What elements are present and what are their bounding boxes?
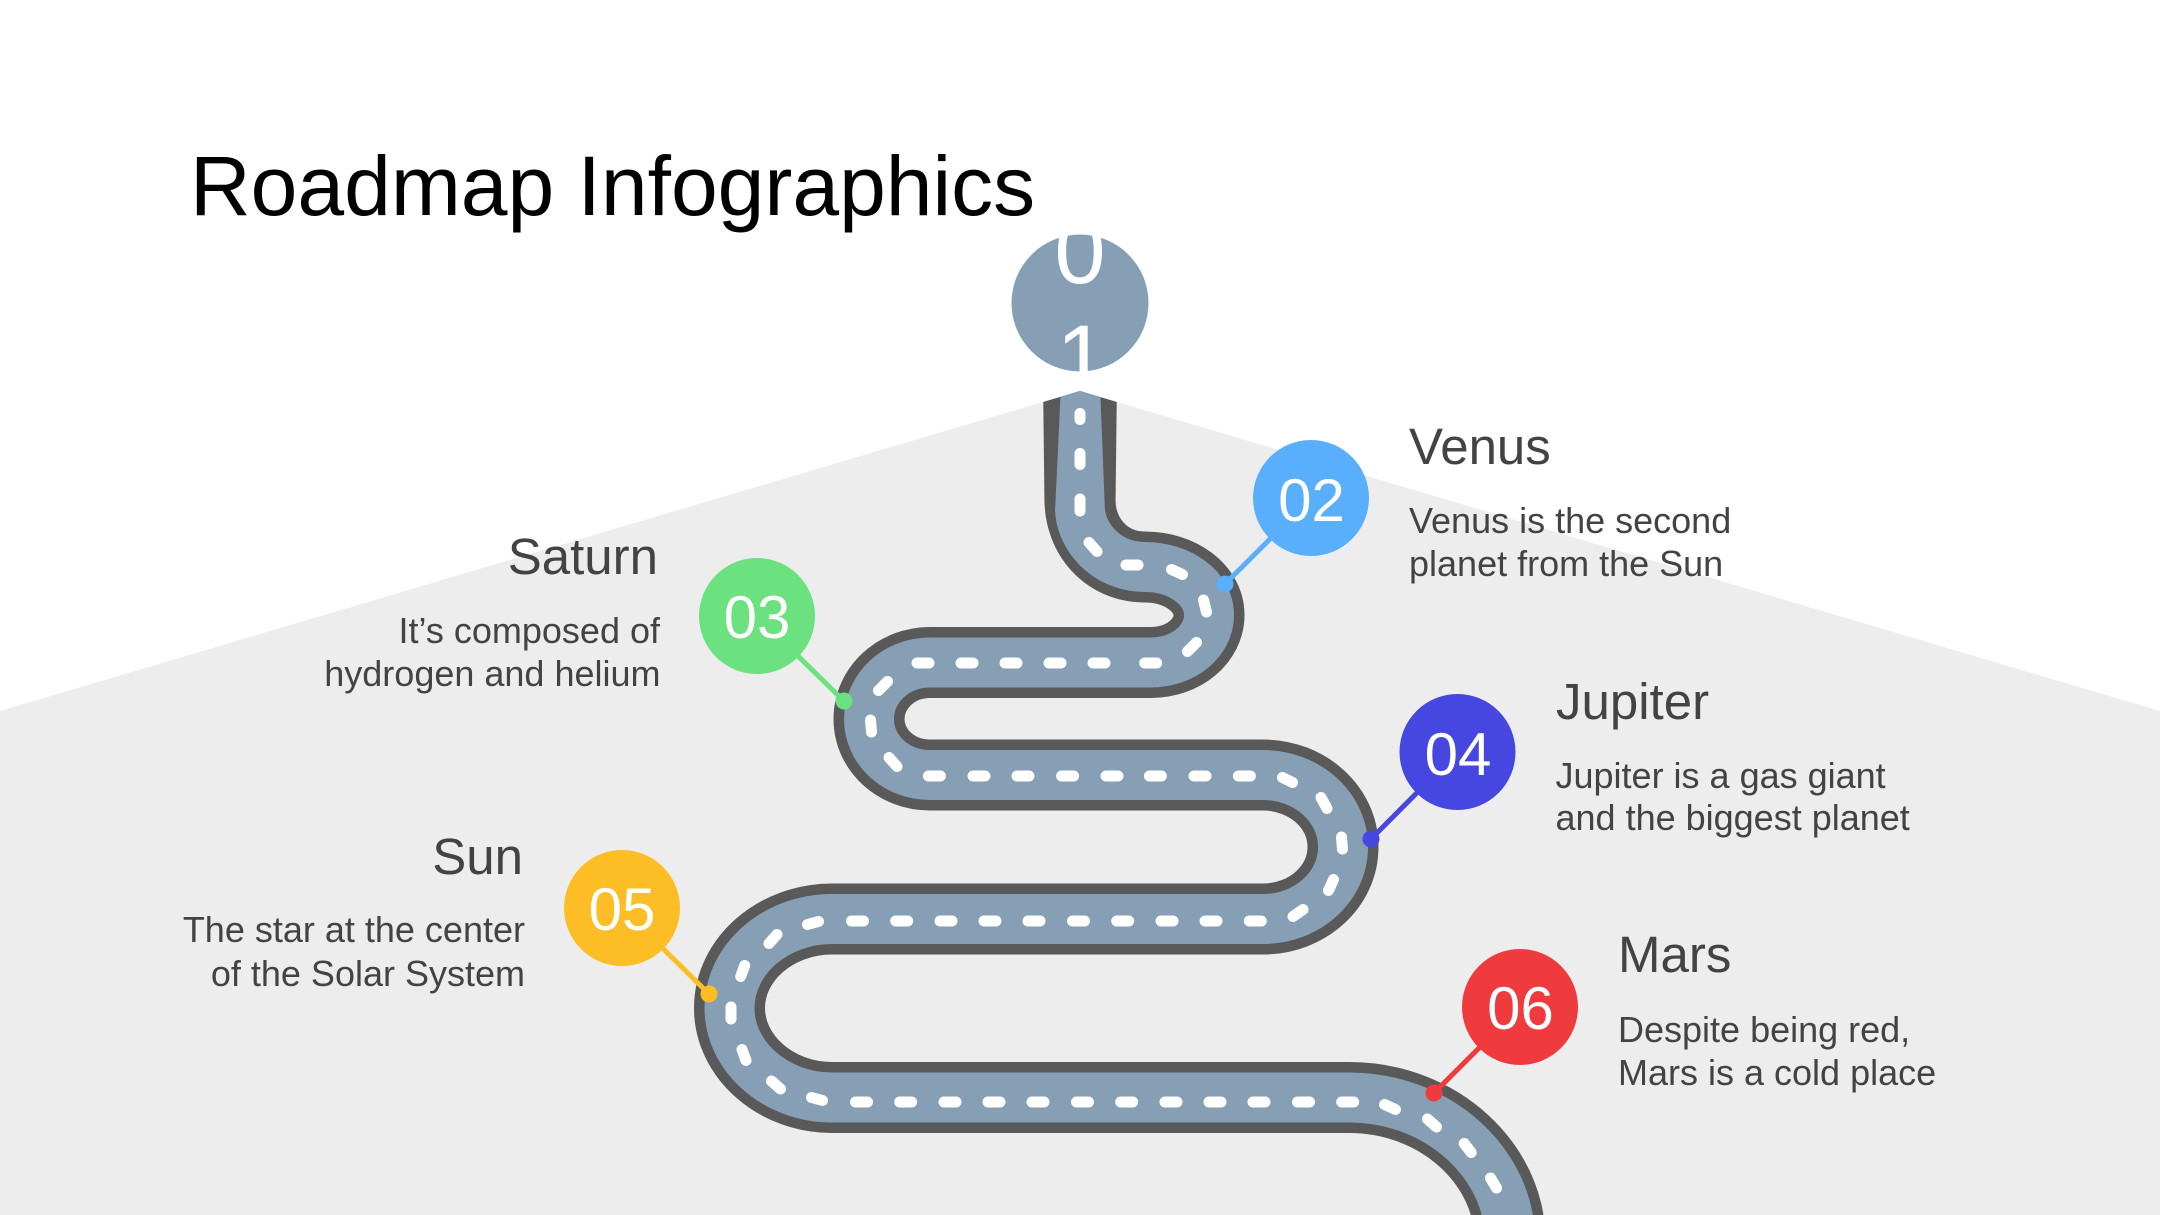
marker 01: 0 [1054,201,1106,303]
label: Venus: Venus [1409,418,1551,475]
label: Saturn: Saturn [508,528,658,585]
marker 04 [1362,694,1516,848]
label: Sun: The star at the center [183,909,525,950]
marker 06 [1426,949,1578,1102]
label: Mars: Despite being red, [1618,1009,1910,1050]
label: Saturn: It’s composed of [399,610,661,651]
label: Jupiter: Jupiter is a gas giant [1556,755,1886,796]
marker 01 [1012,201,1148,409]
label: Sun: Sun [432,828,523,885]
label: Venus: planet from the Sun [1409,543,1723,584]
marker 04: 04 [1425,721,1491,788]
label: Jupiter: and the biggest planet [1556,797,1910,838]
label: Venus: Venus is the second [1409,500,1731,541]
marker 02: 02 [1278,467,1345,534]
marker 03: 03 [724,584,790,651]
winding road [730,380,1510,1215]
marker 02 [1216,440,1369,592]
label: Mars [1618,926,1936,1093]
background mountain shape [0,391,2160,1215]
marker 06: 06 [1487,975,1554,1042]
label: Mars: Mars is a cold place [1618,1052,1936,1093]
marker 05: 05 [589,876,655,943]
label: Sun: of the Solar System [211,953,525,994]
label: Venus [1409,418,1731,584]
label: Mars: Mars [1618,926,1731,983]
label: Saturn [324,528,661,694]
label: Jupiter: Jupiter [1556,673,1709,730]
marker 03 [699,558,852,710]
label: Jupiter [1556,673,1910,838]
marker 05 [564,850,718,1002]
label: Sun [183,828,525,994]
title: Roadmap Infographics [190,139,1035,233]
label: Saturn: hydrogen and helium [324,653,660,694]
marker 01: 1 [1056,307,1108,409]
